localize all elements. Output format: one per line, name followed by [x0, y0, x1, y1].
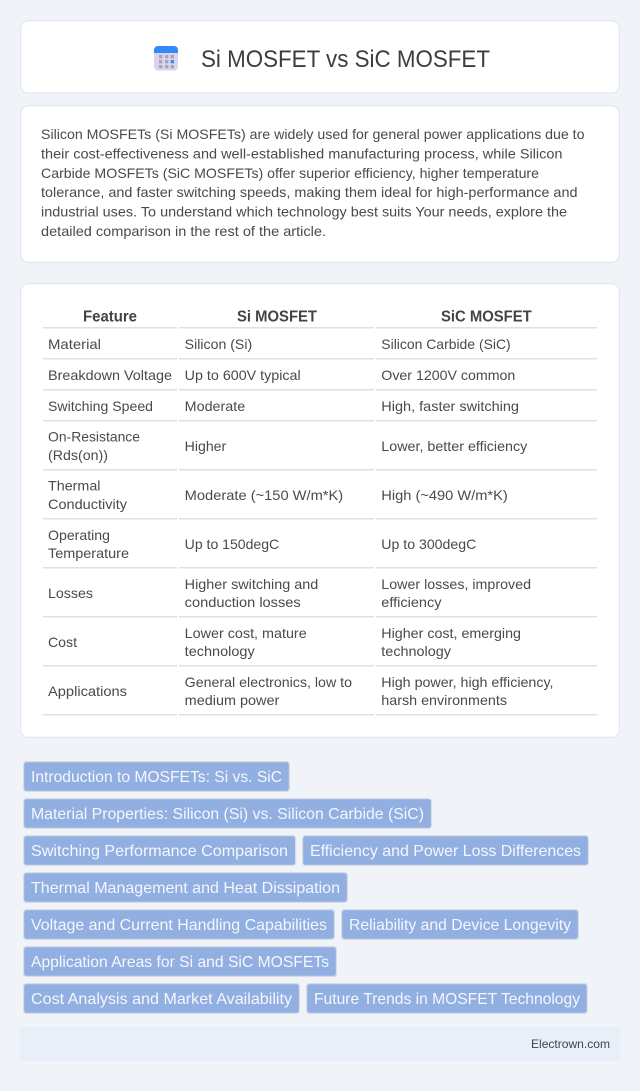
- tag: switching performance: Switching Performance Comparison: [31, 843, 288, 860]
- row: losses: Losses: [48, 585, 93, 601]
- row: thermal conductivity: Moderate (~150 W/m*K): [185, 487, 343, 503]
- row: on-resistance: (Rds(on)): [48, 447, 108, 463]
- row: applications: High power, high efficiency,: [381, 674, 554, 690]
- intro paragraph: [41, 126, 585, 239]
- tag: voltage and current: Voltage and Current Handling Capabilities: [31, 917, 327, 934]
- tag: reliability: [342, 910, 578, 939]
- row: losses: [48, 576, 531, 610]
- tag: future trends: Future Trends in MOSFET Technology: [314, 991, 580, 1008]
- tag: efficiency: Efficiency and Power Loss Differences: [310, 843, 581, 860]
- row: operating temperature: Temperature: [48, 545, 129, 561]
- tag: application areas: Application Areas for Si and SiC MOSFETs: [31, 954, 329, 971]
- row: applications: medium power: [185, 692, 280, 708]
- row: breakdown voltage: [48, 367, 515, 383]
- tag: thermal management: Thermal Management and Heat Dissipation: [31, 880, 340, 897]
- row: losses: conduction losses: [185, 594, 301, 610]
- row: cost: technology: [185, 643, 255, 659]
- panel: introduction: [21, 106, 619, 262]
- row: switching speed: Switching Speed: [48, 398, 153, 414]
- row: cost: Cost: [48, 634, 77, 650]
- tag: introduction: Introduction to MOSFETs: Si vs. SiC: [31, 769, 282, 786]
- row: applications: Applications: [48, 683, 127, 699]
- table header: Feature: [83, 308, 137, 326]
- row: cost: technology: [381, 643, 451, 659]
- row: thermal conductivity: High (~490 W/m*K): [381, 487, 508, 503]
- topic tags: [24, 762, 588, 1013]
- row: on-resistance: On-Resistance: [48, 429, 140, 445]
- intro paragraph: detailed comparison in the rest of the article.: [41, 223, 326, 239]
- row: cost: Higher cost, emerging: [381, 625, 521, 641]
- tag: future trends: [307, 984, 587, 1013]
- row: thermal conductivity: Conductivity: [48, 496, 127, 512]
- title: Si MOSFET vs SiC MOSFET: [201, 46, 490, 73]
- row: on-resistance: Lower, better efficiency: [381, 438, 527, 454]
- intro paragraph: their cost-effectiveness and well-established manufacturing process, while Silicon: [41, 146, 562, 162]
- row: cost: [48, 625, 521, 659]
- header panel: [21, 21, 619, 93]
- tag: introduction: [24, 762, 289, 791]
- row: breakdown voltage: Over 1200V common: [381, 367, 515, 383]
- tag: thermal management: [24, 873, 347, 902]
- row: operating temperature: Operating: [48, 527, 110, 543]
- intro paragraph: Carbide MOSFETs (SiC MOSFETs) offer superior efficiency, higher temperature: [41, 165, 539, 181]
- row: operating temperature: [48, 527, 476, 561]
- row: material: Material: [48, 336, 101, 352]
- table header: Si MOSFET: [237, 308, 317, 326]
- table header: SiC MOSFET: [441, 308, 532, 326]
- row: switching speed: [48, 398, 519, 414]
- row: material: Silicon (Si): [185, 336, 252, 352]
- row: applications: General electronics, low to: [185, 674, 352, 690]
- table header: [83, 308, 532, 326]
- row: applications: harsh environments: [381, 692, 507, 708]
- tag: voltage and current: [24, 910, 334, 939]
- footer: [20, 1027, 620, 1061]
- row: breakdown voltage: Breakdown Voltage: [48, 367, 172, 383]
- tag: reliability: Reliability and Device Longevity: [349, 917, 571, 934]
- row: breakdown voltage: Up to 600V typical: [185, 367, 301, 383]
- row: material: Silicon Carbide (SiC): [381, 336, 511, 352]
- panel: comparison table: [21, 284, 619, 737]
- row: losses: Higher switching and: [185, 576, 318, 592]
- tag: material properties: Material Properties: Silicon (Si) vs. Silicon Carbide (SiC): [31, 806, 424, 823]
- row: switching speed: Moderate: [185, 398, 245, 414]
- tag: efficiency: [303, 836, 588, 865]
- row: on-resistance: Higher: [185, 438, 227, 454]
- intro paragraph: industrial uses. To understand which technology best suits Your needs, explore the: [41, 204, 567, 220]
- tag: application areas: [24, 947, 336, 976]
- row: losses: Lower losses, improved: [381, 576, 531, 592]
- row: material: [48, 336, 511, 352]
- row: thermal conductivity: Thermal: [48, 478, 100, 494]
- row: applications: [48, 674, 554, 708]
- intro paragraph: tolerance, and faster switching speeds, making them ideal for high-performance and: [41, 184, 578, 200]
- row: operating temperature: Up to 300degC: [381, 536, 476, 552]
- tag: switching performance: [24, 836, 296, 865]
- row: operating temperature: Up to 150degC: [185, 536, 279, 552]
- row: thermal conductivity: [48, 478, 508, 512]
- intro paragraph: Silicon MOSFETs (Si MOSFETs) are widely used for general power applications due to: [41, 126, 585, 142]
- row: on-resistance: [48, 429, 527, 463]
- row: switching speed: High, faster switching: [381, 398, 519, 414]
- row: losses: efficiency: [381, 594, 442, 610]
- tag: cost analysis: [24, 984, 299, 1013]
- footer credit: Electrown.com: [531, 1037, 610, 1051]
- icon: calendar grid: [154, 46, 178, 70]
- row: cost: Lower cost, mature: [185, 625, 307, 641]
- tag: material properties: [24, 799, 431, 828]
- tag: cost analysis: Cost Analysis and Market Availability: [31, 991, 292, 1008]
